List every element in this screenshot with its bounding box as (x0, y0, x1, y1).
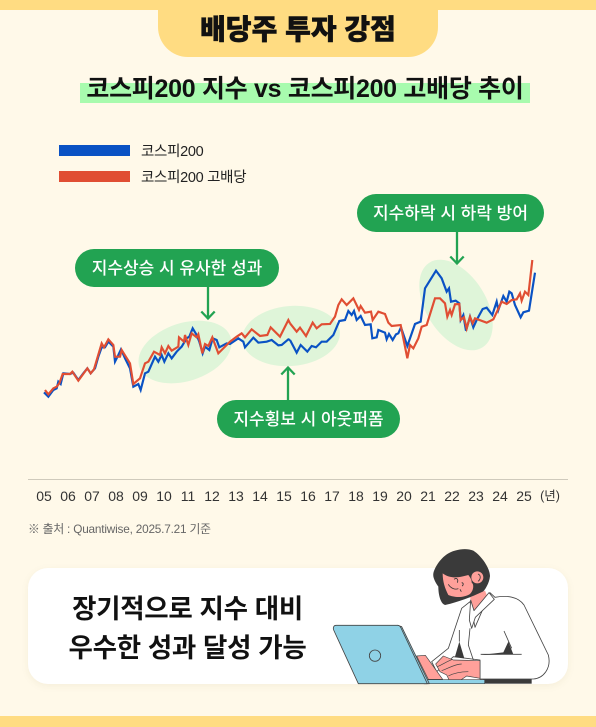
neck (470, 591, 487, 612)
conclusion text: 우수한 성과 달성 가능 (69, 633, 306, 663)
forearm (417, 655, 443, 679)
x axis: 18 (348, 488, 364, 504)
face (443, 573, 473, 597)
arrow: falling market (450, 232, 464, 264)
ear (471, 571, 483, 583)
face details (448, 579, 463, 592)
title tab: 배당주 투자 강점 (200, 14, 396, 45)
bottom band (0, 716, 596, 727)
callout: falling market: 지수하락 시 하락 방어 (373, 204, 528, 223)
callout: rising market (75, 249, 279, 287)
series: KOSPI200 high dividend (45, 260, 532, 394)
laptop logo (369, 650, 381, 661)
illustration: woman at laptop (332, 549, 550, 684)
arrow: flat market (281, 367, 295, 400)
finger lines (437, 659, 468, 676)
title tab (158, 0, 438, 57)
laptop base (427, 680, 485, 684)
x axis: 21 (420, 488, 436, 504)
chart heading: 코스피200 지수 vs 코스피200 고배당 추이 (86, 75, 524, 103)
x axis: 23 (468, 488, 484, 504)
x axis: 14 (252, 488, 268, 504)
x axis: 15 (276, 488, 292, 504)
x axis: 13 (228, 488, 244, 504)
dark under sleeve (483, 677, 532, 684)
x axis: 11 (181, 488, 195, 504)
laptop hinge edge (397, 625, 429, 684)
shirt sleeve and body (432, 593, 549, 679)
highlight ellipses (130, 247, 508, 394)
x axis: 09 (132, 488, 148, 504)
series: KOSPI200 (44, 271, 535, 397)
arrow: rising market (201, 287, 215, 319)
legend item: KOSPI200: 코스피200 (141, 144, 203, 160)
dark shirt folds (455, 642, 513, 658)
x axis: 24 (492, 488, 508, 504)
x axis: 05 (36, 488, 52, 504)
legend (59, 144, 246, 186)
collar (469, 593, 494, 628)
line chart (43, 232, 536, 400)
x axis: 19 (372, 488, 388, 504)
x axis: 25 (516, 488, 532, 504)
callout: flat market (217, 400, 400, 438)
callout: flat market: 지수횡보 시 아웃퍼폼 (233, 410, 384, 429)
legend item: KOSPI200 high dividend (59, 170, 246, 186)
conclusion text (69, 594, 306, 663)
x axis: 20 (396, 488, 412, 504)
top band (0, 0, 596, 10)
hair (433, 549, 490, 605)
x axis: (년) (540, 489, 560, 503)
callout: falling market (357, 194, 544, 232)
source note: ※ 출처 : Quantiwise, 2025.7.21 기준 (28, 522, 211, 536)
laptop lid (333, 625, 427, 684)
x axis (28, 479, 568, 510)
hands (436, 656, 480, 682)
callout: rising market: 지수상승 시 유사한 성과 (92, 259, 262, 278)
x axis: 10 (156, 488, 172, 504)
chart heading (80, 83, 530, 103)
conclusion card (28, 568, 568, 684)
x axis: 16 (300, 488, 316, 504)
conclusion text: 장기적으로 지수 대비 (72, 594, 303, 624)
x axis: 17 (324, 488, 340, 504)
x axis: 06 (60, 488, 76, 504)
x axis: 07 (84, 488, 100, 504)
x axis: 08 (108, 488, 124, 504)
legend item: KOSPI200 high dividend: 코스피200 고배당 (141, 170, 246, 186)
legend item: KOSPI200 (59, 144, 204, 160)
x axis: 22 (444, 488, 460, 504)
x axis: 12 (204, 488, 220, 504)
